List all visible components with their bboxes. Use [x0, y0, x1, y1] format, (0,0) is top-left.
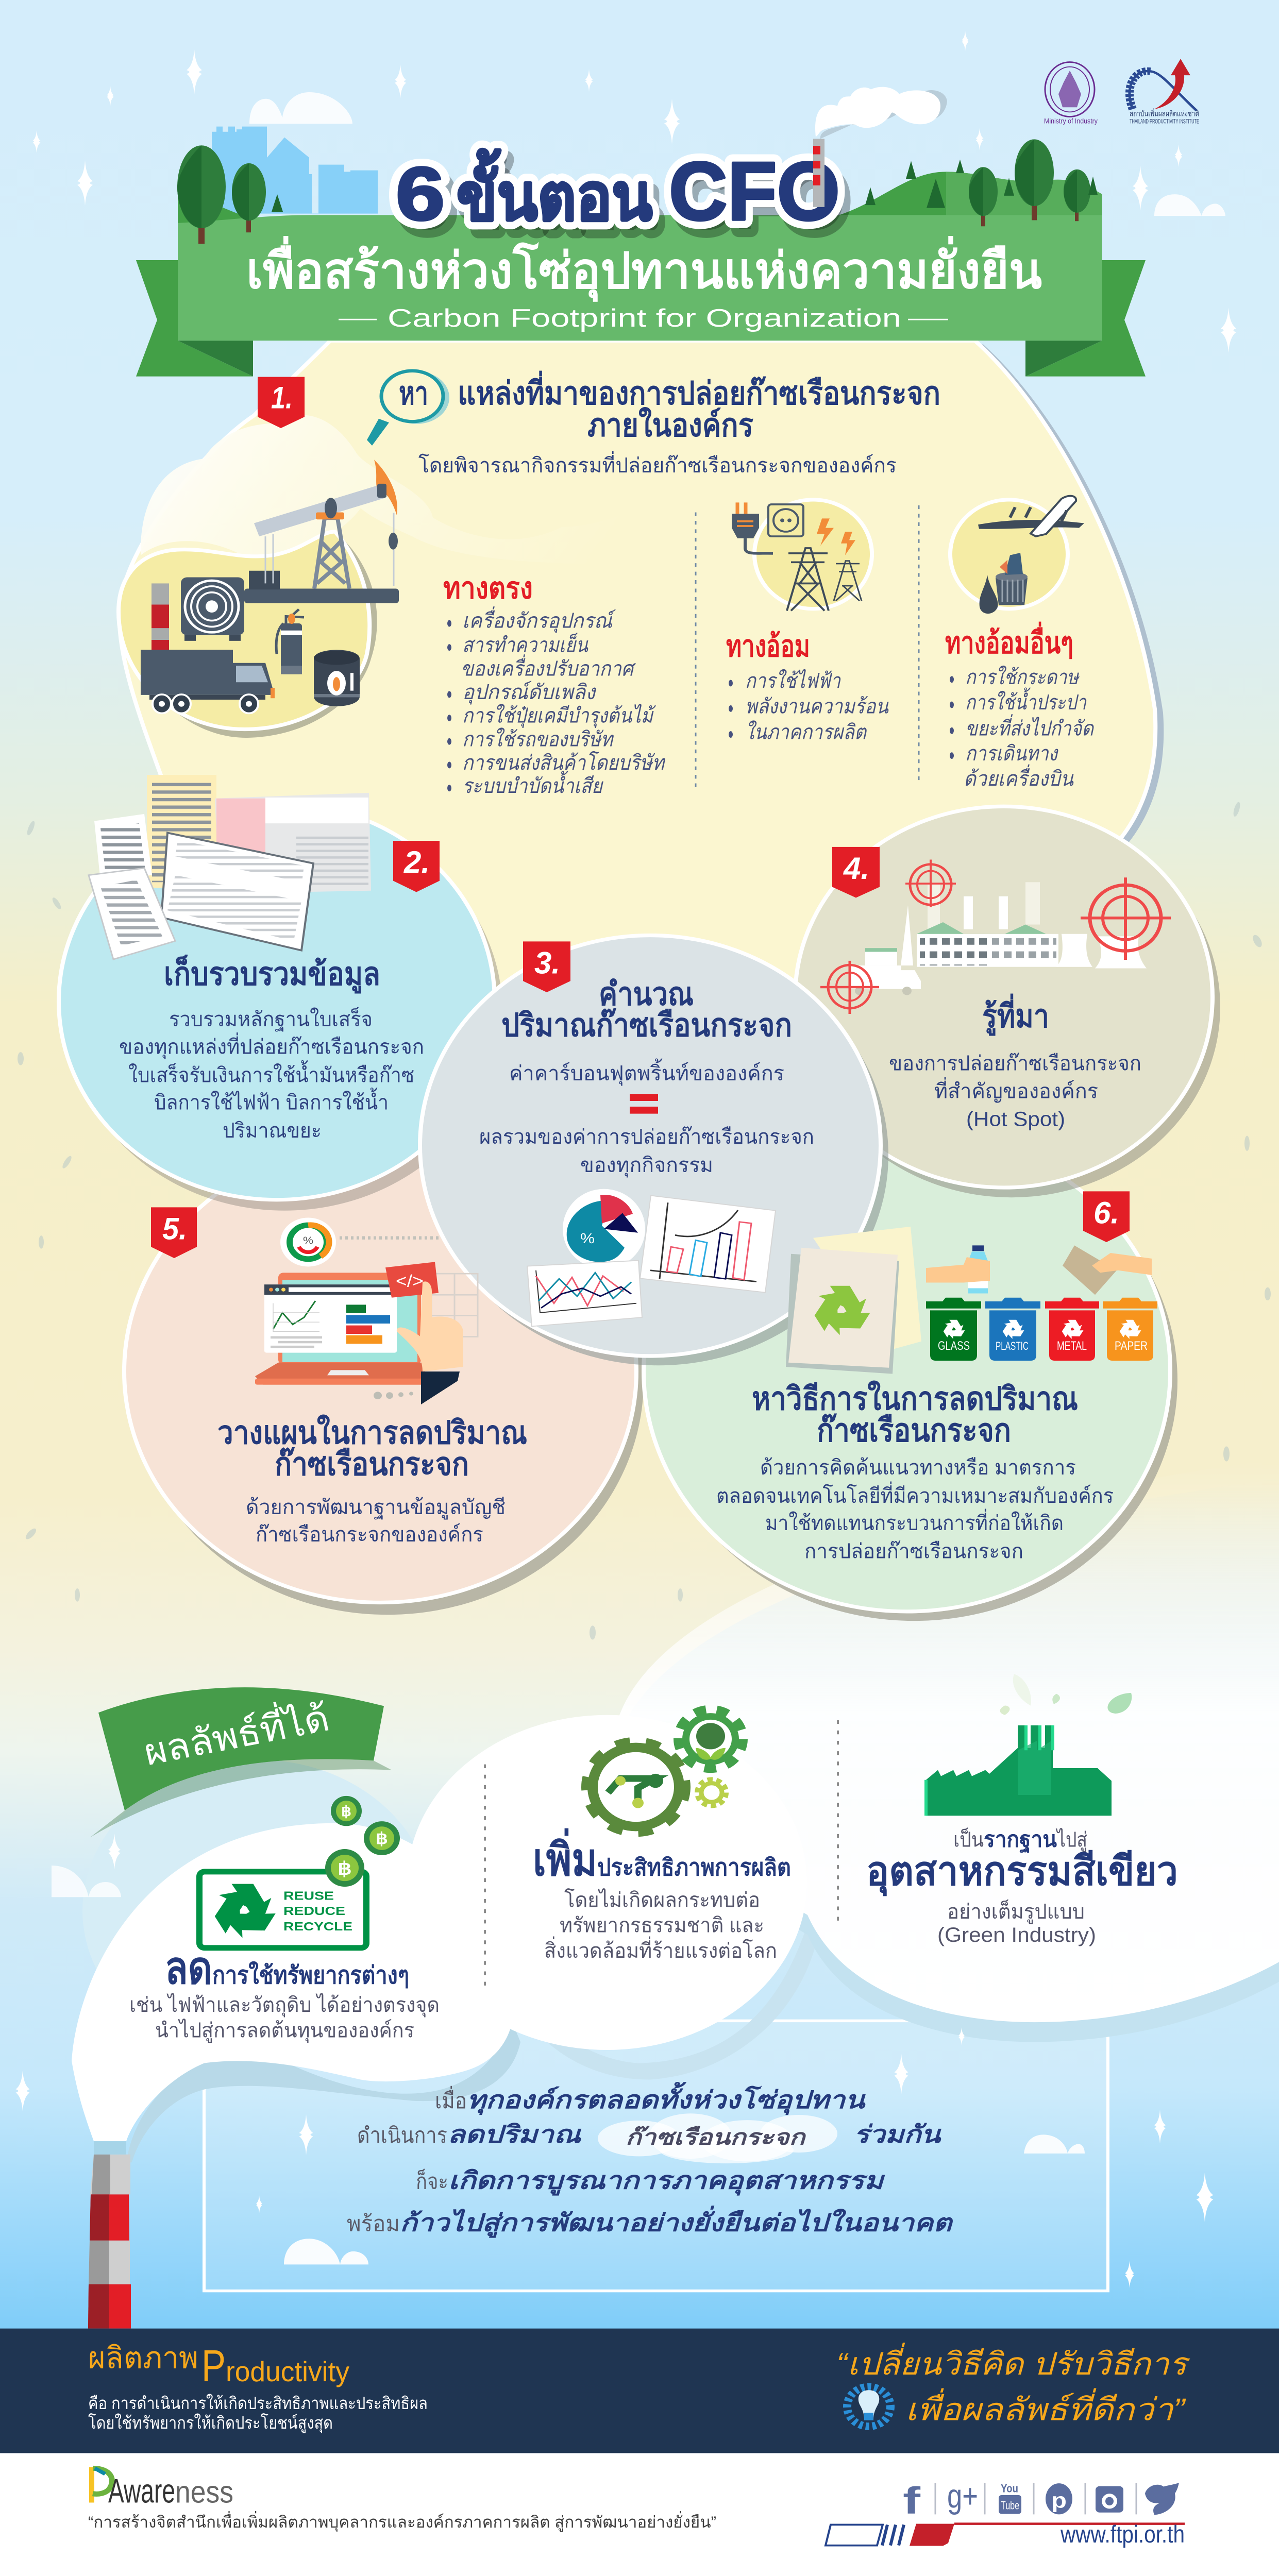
recycling bins: METAL — [1057, 1339, 1087, 1353]
hills — [835, 172, 1102, 221]
recycling bins: PAPER — [1115, 1339, 1148, 1353]
icon: light bulb — [847, 2387, 890, 2427]
title: 6 — [396, 152, 445, 236]
result 3 text: (Green Industry) — [937, 1923, 1096, 1946]
column: indirect: พลังงานความร้อน — [745, 694, 889, 718]
result 3 text: ไปสู่ — [1056, 1828, 1087, 1852]
conclusion text: ดำเนินการ — [357, 2124, 447, 2147]
title: ขั้นตอน — [463, 158, 659, 243]
cloud shadows — [126, 1920, 819, 2162]
column: direct: การใช้ปุ๋ยเคมีบำรุงต้นไม้ — [462, 704, 657, 728]
text: step 4 — [889, 993, 1141, 1130]
recycling bins: GLASS — [938, 1339, 970, 1353]
heading: step 1: หา — [399, 375, 428, 411]
text: step 4: ของการปล่อยก๊าซเรือนกระจก — [889, 1052, 1141, 1075]
illustration: laptop: </> — [396, 1272, 424, 1291]
title: CFO — [669, 145, 840, 238]
text: step 5: ก๊าซเรือนกระจก — [275, 1446, 469, 1482]
conclusion text: พร้อม — [347, 2212, 400, 2236]
title: 6 — [402, 161, 451, 245]
FTPI mark — [826, 2520, 1185, 2548]
icon: leaves — [1000, 1674, 1132, 1715]
smoke cloud — [815, 87, 947, 139]
text: step 6: ด้วยการคิดค้นแนวทางหรือ มาตรการ — [760, 1456, 1076, 1479]
social icons: p — [1051, 2488, 1067, 2513]
flag 4: 4. — [843, 852, 869, 886]
text: step 5: วางแผนในการลดปริมาณ — [217, 1414, 527, 1450]
text: step 6 — [716, 1380, 1114, 1563]
result 3 text — [866, 1827, 1178, 1946]
conclusion text: ร่วมกัน — [854, 2121, 941, 2148]
text: step 6: ตลอดจนเทคโนโลยีที่มีความเหมาะสมกับองค์กร — [716, 1482, 1114, 1507]
social icons: Tube — [1001, 2499, 1019, 2512]
text: step 2 — [119, 955, 424, 1142]
illustration: factory hot spot — [850, 882, 1147, 995]
logo: Thailand Productivity Institute: THAILAND PRODUCTIVITY INSTITUTE — [1130, 118, 1199, 125]
cloud middle — [407, 1715, 807, 2050]
conclusion text: ทุกองค์กรตลอดทั้งห่วงโซ่อุปทาน — [467, 2082, 866, 2115]
subtitle english: Carbon Footprint for Organization — [388, 303, 901, 332]
awareness tagline: “การสร้างจิตสำนึกเพื่อเพิ่มผลิตภาพบุคลากรและองค์กรภาคการผลิต สู่การพัฒนาอย่างยั่งยืน” — [88, 2511, 716, 2532]
heading: step 1: ภายในองค์กร — [587, 406, 753, 443]
flag 3 — [523, 941, 570, 992]
result 2 text: โดยไม่เกิดผลกระทบต่อ — [564, 1888, 760, 1911]
flag 1: 1. — [271, 381, 293, 415]
slogan — [836, 2343, 1190, 2427]
conclusion text: เกิดการบูรณาการภาคอุตสาหกรรม — [448, 2166, 885, 2196]
coins: ฿ — [341, 1804, 351, 1820]
icon: targets — [820, 859, 1171, 1014]
result 3 text: เป็น — [953, 1827, 984, 1851]
text: step 3: ผลรวมของค่าการปล่อยก๊าซเรือนกระจก — [479, 1125, 814, 1148]
text: step 2: บิลการใช้ไฟฟ้า บิลการใช้น้ำ — [154, 1088, 389, 1114]
back cloud behind ribbon — [82, 1760, 433, 2061]
text: step 3: คำนวณ — [599, 976, 694, 1012]
conclusion text — [347, 2082, 953, 2238]
small clouds top — [249, 92, 1225, 216]
icon: line chart — [527, 1261, 642, 1326]
column: other indirect: ทางอ้อมอื่นๆ — [945, 622, 1073, 659]
heading: step 1: แหล่งที่มาของการปล่อยก๊าซเรือนกระจก — [458, 370, 940, 411]
illustration: laptop — [255, 1262, 478, 1404]
conclusion frame — [204, 2021, 1108, 2291]
icon: electricity — [732, 500, 872, 611]
flag 5: 5. — [162, 1212, 187, 1246]
step 1 big blob shadow — [128, 344, 1164, 1227]
column: indirect: การใช้ไฟฟ้า — [745, 669, 841, 692]
logo: Ministry of Industry: Ministry of Industry — [1044, 117, 1098, 125]
text: step 6: หาวิธีการในการลดปริมาณ — [752, 1380, 1078, 1416]
coins: ฿ — [338, 1858, 352, 1878]
cloud behind gas word — [598, 2113, 837, 2163]
result 2 text: เพิ่ม — [533, 1828, 597, 1885]
text: step 4: (Hot Spot) — [966, 1107, 1065, 1130]
illustration: recycled paper — [786, 1227, 921, 1374]
PAwareness logo: Aware — [108, 2472, 175, 2510]
icon circle: direct emissions — [119, 532, 377, 738]
text: step 2: ปริมาณขยะ — [223, 1119, 322, 1142]
logo: Thailand Productivity Institute: สถาบันเพิ่มผลผลิตแห่งชาติ — [1130, 108, 1199, 118]
trees — [177, 139, 1098, 244]
chimney top — [813, 139, 824, 207]
logo: Ministry of Industry — [1044, 62, 1098, 125]
text: step 6: ก๊าซเรือนกระจก — [817, 1412, 1011, 1448]
text: step 2: ใบเสร็จรับเงินการใช้น้ำมันหรือก๊าซ — [128, 1060, 414, 1087]
text: step 3: ปริมาณก๊าซเรือนกระจก — [501, 1007, 792, 1043]
text: step 6: การปล่อยก๊าซเรือนกระจก — [804, 1539, 1023, 1563]
productivity definition: โดยใช้ทรัพยากรให้เกิดประโยชน์สูงสุด — [88, 2414, 333, 2433]
icon: bar chart — [640, 1196, 776, 1293]
result 1 text: เช่น ไฟฟ้าและวัตถุดิบ ได้อย่างตรงจุด — [129, 1993, 440, 2018]
column: other indirect: การเดินทาง — [965, 742, 1058, 765]
text: step 3: ค่าคาร์บอนฟุตพริ้นท์ขององค์กร — [509, 1058, 784, 1086]
result 1 text: นำไปสู่การลดต้นทุนขององค์กร — [155, 2019, 414, 2043]
cloud left with smoke — [72, 1823, 513, 2141]
footer white band — [0, 2453, 1279, 2576]
illustration: chimney — [152, 583, 169, 652]
PAwareness logo: ness — [175, 2475, 233, 2510]
flag 5 — [151, 1207, 197, 1258]
illustration: oil pump — [244, 460, 399, 603]
text: step 2: รวบรวมหลักฐานใบเสร็จ — [169, 1007, 373, 1031]
illustration: truck — [141, 650, 275, 713]
flag 6 — [1083, 1191, 1130, 1242]
result 1 text — [129, 1943, 440, 2043]
flag 1 — [258, 377, 305, 428]
result 2 text — [533, 1828, 791, 1962]
sparkles lower — [15, 1834, 1213, 2288]
conclusion text: ลดปริมาณ — [447, 2121, 582, 2148]
icon: reuse reduce recycle: REUSE — [283, 1890, 334, 1903]
flag 4 — [832, 847, 880, 897]
icon: plane and waste — [950, 496, 1084, 614]
circle 2 — [59, 803, 502, 1211]
productivity definition: คือ การดำเนินการให้เกิดประสิทธิภาพและประสิทธิผล — [88, 2394, 428, 2413]
productivity definition: P — [201, 2341, 226, 2391]
conclusion text: ก็จะ — [416, 2168, 448, 2194]
small clouds lower — [52, 1866, 1085, 2264]
text: step 6: มาใช้ทดแทนกระบวนการที่ก่อให้เกิด — [765, 1509, 1064, 1534]
result 2 text: ทรัพยากรธรรมชาติ และ — [560, 1913, 764, 1937]
title — [396, 145, 846, 247]
column: direct: การใช้รถของบริษัท — [462, 727, 614, 751]
icon: gears — [591, 1711, 742, 1828]
column: other indirect: การใช้น้ำประปา — [965, 687, 1087, 714]
slogan: เพื่อผลลัพธ์ที่ดีกว่า” — [905, 2388, 1186, 2427]
ribbon: results — [90, 1687, 392, 1837]
column: direct: ของเครื่องปรับอากาศ — [461, 654, 636, 680]
text: step 5 — [217, 1414, 527, 1546]
result 3 text: รากฐาน — [984, 1827, 1057, 1853]
footer dark band — [0, 2329, 1279, 2453]
result 2 text: ประสิทธิภาพการผลิต — [597, 1855, 791, 1881]
text: step 3: ของทุกกิจกรรม — [580, 1154, 713, 1178]
title: 6 — [396, 152, 445, 236]
result 1 text: ลด — [165, 1943, 212, 1993]
column: direct: เครื่องจักรอุปกรณ์ — [462, 606, 616, 633]
icon: donut: % — [303, 1235, 313, 1246]
icon: pie chart — [563, 1189, 645, 1269]
title: CFO — [669, 145, 840, 238]
conclusion text: ก๊าซเรือนกระจก — [626, 2125, 806, 2149]
coins — [325, 1796, 400, 1887]
subheading: step 1: โดยพิจารณากิจกรรมที่ปล่อยก๊าซเรือนกระจกขององค์กร — [418, 451, 897, 477]
social icons: You — [1001, 2482, 1018, 2495]
banner — [178, 215, 1102, 341]
icon: green factory — [926, 1725, 1112, 1816]
text: step 3 — [479, 976, 814, 1178]
text: step 2: ของทุกแหล่งที่ปล่อยก๊าซเรือนกระจก — [119, 1033, 424, 1060]
buildings skyline — [212, 127, 378, 214]
illustration: documents — [89, 775, 371, 959]
column: direct — [443, 571, 666, 797]
result 3 text: อุตสาหกรรมสีเขียว — [866, 1849, 1178, 1896]
flag 2 — [393, 841, 440, 892]
column: other indirect: การใช้กระดาษ — [965, 666, 1080, 688]
text: step 4: รู้ที่มา — [982, 993, 1049, 1037]
column: direct: ทางตรง — [443, 571, 533, 605]
subtitle: เพื่อสร้างห่วงโซ่อุปทานแห่งความยั่งยืน — [246, 236, 1042, 302]
illustration: fire extinguisher — [276, 609, 304, 674]
column: direct: อุปกรณ์ดับเพลิง — [462, 681, 596, 705]
illustration: air conditioner — [181, 578, 244, 641]
title: ขั้นตอน — [457, 148, 652, 234]
icon: reuse reduce recycle: RECYCLE — [283, 1920, 352, 1934]
social icons: g+ — [947, 2477, 978, 2515]
social icons — [903, 2477, 1179, 2522]
slogan: “เปลี่ยนวิธีคิด ปรับวิธีการ — [836, 2343, 1190, 2381]
productivity definition — [88, 2341, 428, 2433]
banner ribbon tails — [136, 260, 1146, 377]
column: other indirect: ขยะที่ส่งไปกำจัด — [965, 714, 1095, 740]
column: direct: สารทำความเย็น — [462, 633, 588, 656]
column: direct: ระบบบำบัดน้ำเสีย — [462, 771, 603, 797]
column: indirect: ในภาคการผลิต — [745, 720, 867, 743]
illustration backing cloud — [141, 415, 680, 565]
logo: Thailand Productivity Institute — [1130, 59, 1199, 125]
illustration: hands with bottle and newspaper — [926, 1245, 1152, 1295]
illustration: oil barrel — [314, 650, 360, 706]
flag 3: 3. — [534, 946, 560, 980]
productivity definition: ผลิตภาพ — [88, 2341, 198, 2375]
conclusion text: ก้าวไปสู่การพัฒนาอย่างยั่งยืนต่อไปในอนาคต — [400, 2206, 953, 2238]
smokestack — [88, 2141, 131, 2329]
recycling bins: PLASTIC — [996, 1340, 1029, 1352]
flag 2: 2. — [403, 845, 430, 879]
result 1 text: การใช้ทรัพยากรต่างๆ — [212, 1961, 409, 1989]
circle 3 — [420, 936, 888, 1365]
icon: magnifier — [367, 371, 449, 446]
FTPI mark: www.ftpi.or.th — [1060, 2520, 1185, 2548]
coins: ฿ — [376, 1829, 388, 1848]
sparkles — [33, 31, 1236, 353]
circle 4 — [795, 806, 1220, 1197]
text: step 5: ก๊าซเรือนกระจกขององค์กร — [256, 1523, 483, 1546]
column: indirect: ทางอ้อม — [726, 630, 810, 663]
text: step 5: ด้วยการพัฒนาฐานข้อมูลบัญชี — [246, 1496, 506, 1519]
column: other indirect: ด้วยเครื่องบิน — [964, 764, 1074, 790]
result 2 text: สิ่งแวดล้อมที่ร้ายแรงต่อโลก — [544, 1937, 777, 1962]
icon: pie chart: % — [580, 1231, 595, 1246]
title: ขั้นตอน — [457, 148, 652, 234]
conclusion text: เมื่อ — [435, 2086, 467, 2113]
title: CFO — [675, 154, 846, 247]
text: step 2: เก็บรวบรวมข้อมูล — [164, 955, 380, 994]
column: direct: การขนส่งสินค้าโดยบริษัท — [462, 751, 666, 774]
flag 6: 6. — [1093, 1196, 1119, 1230]
text: step 4: ที่สำคัญขององค์กร — [934, 1077, 1098, 1103]
recycling bins — [926, 1298, 1157, 1361]
cloud layer right — [613, 1459, 1279, 2042]
result 3 text: อย่างเต็มรูปแบบ — [947, 1900, 1085, 1924]
circle 6 — [644, 1131, 1177, 1621]
column: other indirect — [945, 622, 1095, 790]
ribbon: results: ผลลัพธ์ที่ได้ — [139, 1692, 333, 1773]
circle 5 — [124, 1141, 644, 1615]
icon: donut — [280, 1217, 439, 1266]
column: indirect — [726, 630, 889, 743]
icon: reuse reduce recycle: REDUCE — [283, 1905, 345, 1918]
icon: reuse reduce recycle — [199, 1872, 366, 1948]
productivity definition: roductivity — [226, 2356, 349, 2387]
step 1 big blob — [120, 341, 1155, 1223]
PAwareness logo — [92, 2467, 233, 2510]
heading: step 1 — [399, 370, 940, 443]
social icons: f — [903, 2480, 921, 2522]
